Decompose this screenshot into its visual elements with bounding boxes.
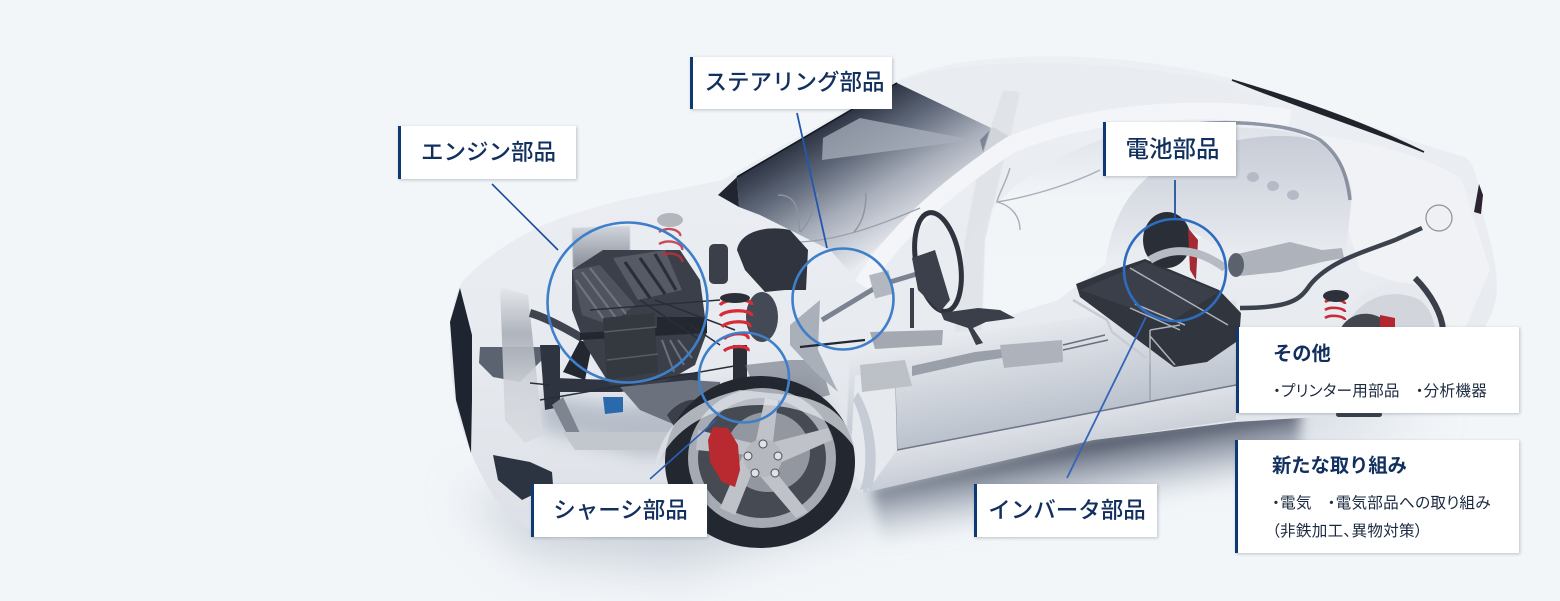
highlight circle: steering: [792, 248, 894, 350]
windshield corner dark: [980, 127, 1010, 160]
leader: steering: [797, 113, 827, 248]
engine air box fade: [572, 226, 630, 268]
ribbed hoses: [662, 340, 692, 372]
rear tyre bottom: [1336, 412, 1382, 417]
A pillar arc: [862, 111, 1290, 285]
steering joint: [869, 270, 895, 298]
front strut: [733, 345, 747, 393]
car body shell: [450, 56, 1497, 540]
rear coil spring: [1325, 300, 1345, 320]
label: chassis parts: シャーシ部品: [553, 498, 688, 523]
reservoir cylinder: [709, 244, 728, 284]
below engine shading: [540, 380, 830, 455]
leader: inverter: [1067, 317, 1146, 478]
card heading: new initiatives: 新たな取り組み: [1272, 456, 1407, 477]
shift assembly: [870, 330, 943, 349]
air filter tube: [667, 400, 705, 436]
lug nut ring: [744, 440, 782, 477]
cowl line: [800, 208, 920, 242]
hood hinge wedge: [718, 177, 739, 207]
card text: new initiatives: [1272, 494, 1491, 540]
battery rails: [1130, 268, 1228, 330]
card text: others: ・プリンター用部品 ・分析機器: [1273, 383, 1487, 400]
suspension frame: [745, 360, 830, 405]
leader: engine: [492, 184, 558, 250]
windshield interior gradient: [737, 83, 1010, 272]
sill band: [863, 385, 1236, 493]
card text: new initiatives: ・電気 ・電気部品への取り組み: [1272, 495, 1491, 512]
rim inner: [698, 398, 826, 518]
translucent fender over wheel top: [655, 390, 856, 470]
battery tray rim: [1073, 300, 1146, 358]
radiator: [500, 287, 543, 443]
card text: new initiatives: （非鉄加工、異物対策）: [1272, 523, 1423, 540]
filler cap: [1426, 205, 1452, 231]
muffler end: [1228, 253, 1244, 277]
lower tray: [563, 432, 670, 450]
tray bracket: [1150, 325, 1180, 365]
label: battery parts: [1103, 122, 1236, 176]
steering wheel rim: [908, 209, 968, 315]
fuel pipe: [1240, 228, 1422, 308]
label: steering parts: ステアリング部品: [704, 70, 884, 95]
exhaust pipe arch: [1150, 251, 1225, 268]
rear rim: [1345, 294, 1435, 330]
front crossmember: [555, 372, 700, 392]
windshield top edge: [737, 83, 897, 177]
rear body highlight: [1290, 134, 1490, 340]
rear disc: [1143, 212, 1191, 268]
rear window dark edge: [1165, 123, 1350, 200]
headlight: [479, 347, 550, 382]
rear deck holes: [1247, 172, 1299, 200]
front wheel: [665, 376, 855, 548]
door sill dark line: [897, 385, 1236, 450]
wiring in windshield: [778, 193, 866, 232]
firewall bracket: [790, 300, 838, 392]
rear spring mount: [1323, 290, 1349, 302]
intake runners: [572, 265, 635, 325]
highlight circle: battery: [1124, 219, 1226, 321]
steering column: [800, 209, 968, 347]
engine battery block: [603, 313, 658, 380]
highlight circle: chassis: [699, 332, 789, 422]
upper radiator hose: [530, 313, 582, 338]
label: engine parts: エンジン部品: [421, 140, 556, 165]
side door window: [960, 127, 1350, 330]
rear caliper: [1380, 315, 1395, 330]
label: battery parts: 電池部品: [1126, 136, 1220, 162]
grille: [450, 288, 472, 453]
battery top darker: [1080, 262, 1219, 322]
label: steering parts: [690, 57, 892, 109]
hub: [744, 439, 782, 477]
roof inner panel: [897, 63, 1290, 137]
rear suspension red: [1188, 228, 1198, 280]
steering lower link: [800, 340, 865, 347]
upper spring mount: [657, 213, 683, 227]
battery pack: [1073, 259, 1241, 367]
tyre: [665, 376, 855, 548]
red caliper: [708, 427, 740, 487]
card: others: [1236, 327, 1519, 413]
upper spring: [659, 229, 682, 262]
front coil spring: [720, 300, 752, 351]
windshield inner light panel: [822, 118, 973, 160]
fog lamp: [493, 455, 553, 500]
muffler: [1233, 242, 1344, 276]
valve cover: [613, 250, 682, 300]
card heading: others: その他: [1273, 344, 1331, 365]
label: chassis parts: [531, 484, 707, 537]
roof black seam: [1232, 80, 1424, 152]
rim: [688, 388, 836, 528]
tunnel thin pipes: [1063, 335, 1108, 350]
rear arch tyre edge: [1415, 278, 1443, 330]
oil filter: [603, 397, 623, 414]
center tube: [912, 349, 1002, 376]
front exhaust cat: [860, 360, 912, 392]
frame diagonal: [563, 340, 592, 380]
seat bracket: [941, 308, 1015, 345]
shift lever: [910, 288, 914, 328]
lower engine: [620, 380, 720, 427]
pipes: [530, 300, 740, 400]
label: engine parts: [398, 126, 576, 179]
valve cover ribs: [625, 254, 676, 298]
engine block: [530, 226, 740, 436]
card: new initiatives: [1235, 440, 1519, 553]
block ribs: [604, 327, 658, 360]
B pillar: [955, 90, 1020, 332]
fender edge over wheel: [853, 392, 876, 490]
washer tank: [737, 228, 808, 292]
lower door panel: [845, 300, 1240, 470]
brake booster: [746, 292, 778, 342]
label: inverter parts: インバータ部品: [988, 498, 1146, 523]
leader: battery: [1174, 180, 1176, 219]
highlight circle: engine: [548, 222, 708, 382]
brake disc: [726, 412, 810, 492]
spokes: [696, 398, 832, 518]
label: inverter parts: [974, 484, 1157, 537]
door cut lines: [895, 330, 1150, 450]
ground shadow: [460, 400, 1440, 570]
front fender panel: [850, 375, 897, 490]
radiator support: [540, 345, 560, 410]
tail lamp: [1474, 184, 1483, 214]
lower arm: [552, 397, 580, 440]
rear seat interior shade: [1105, 136, 1352, 268]
rear tunnel cylinder: [1000, 340, 1063, 368]
strut top mount: [720, 293, 750, 303]
engine mass: [572, 250, 707, 385]
rear disc centre: [1340, 314, 1395, 330]
leader: chassis: [650, 420, 716, 479]
manifold bars: [580, 317, 707, 340]
wiring in window: [997, 168, 1100, 230]
rear wheel arch: [1340, 282, 1440, 330]
intake runner lines: [576, 268, 626, 322]
steering hub: [912, 250, 950, 312]
